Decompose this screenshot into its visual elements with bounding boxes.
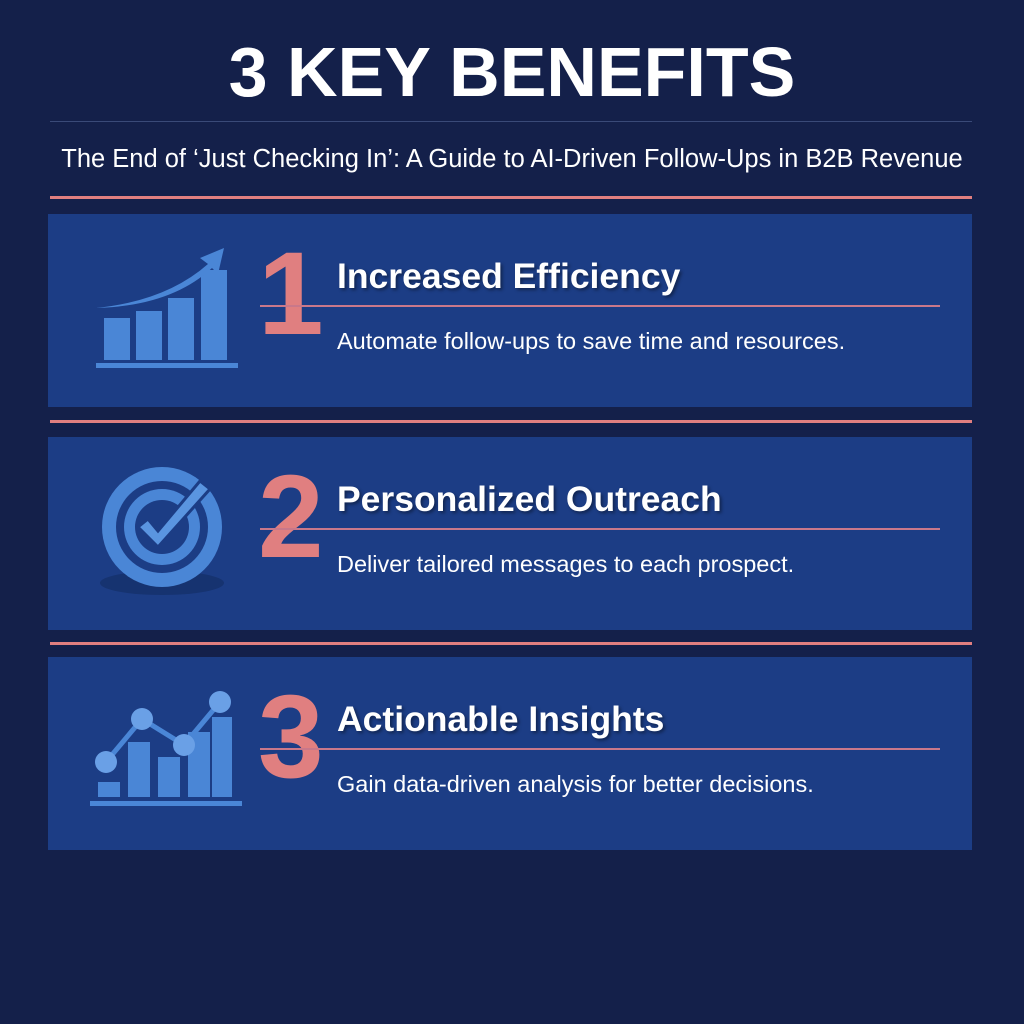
description: Automate follow-ups to save time and resources. — [337, 328, 845, 354]
panel: personalized outreach — [48, 437, 972, 630]
title: 3 KEY BENEFITS — [229, 33, 795, 111]
number 2: 2 — [258, 451, 324, 583]
heading: Personalized Outreach — [337, 479, 722, 519]
icon: target check — [100, 467, 224, 595]
number 3: 3 — [258, 671, 324, 803]
heading: Increased Efficiency — [337, 256, 680, 296]
panel: actionable insights — [48, 657, 972, 850]
subtitle: The End of ‘Just Checking In’: A Guide to AI-Driven Follow-Ups in B2B Revenue — [61, 145, 963, 173]
icon: growth chart — [96, 248, 238, 368]
description: Deliver tailored messages to each prospect. — [337, 551, 794, 577]
number 1: 1 — [258, 228, 324, 360]
panel: increased efficiency — [48, 214, 972, 407]
description: Gain data-driven analysis for better decisions. — [337, 771, 814, 797]
heading: Actionable Insights — [337, 699, 664, 739]
icon: data chart — [90, 691, 242, 806]
